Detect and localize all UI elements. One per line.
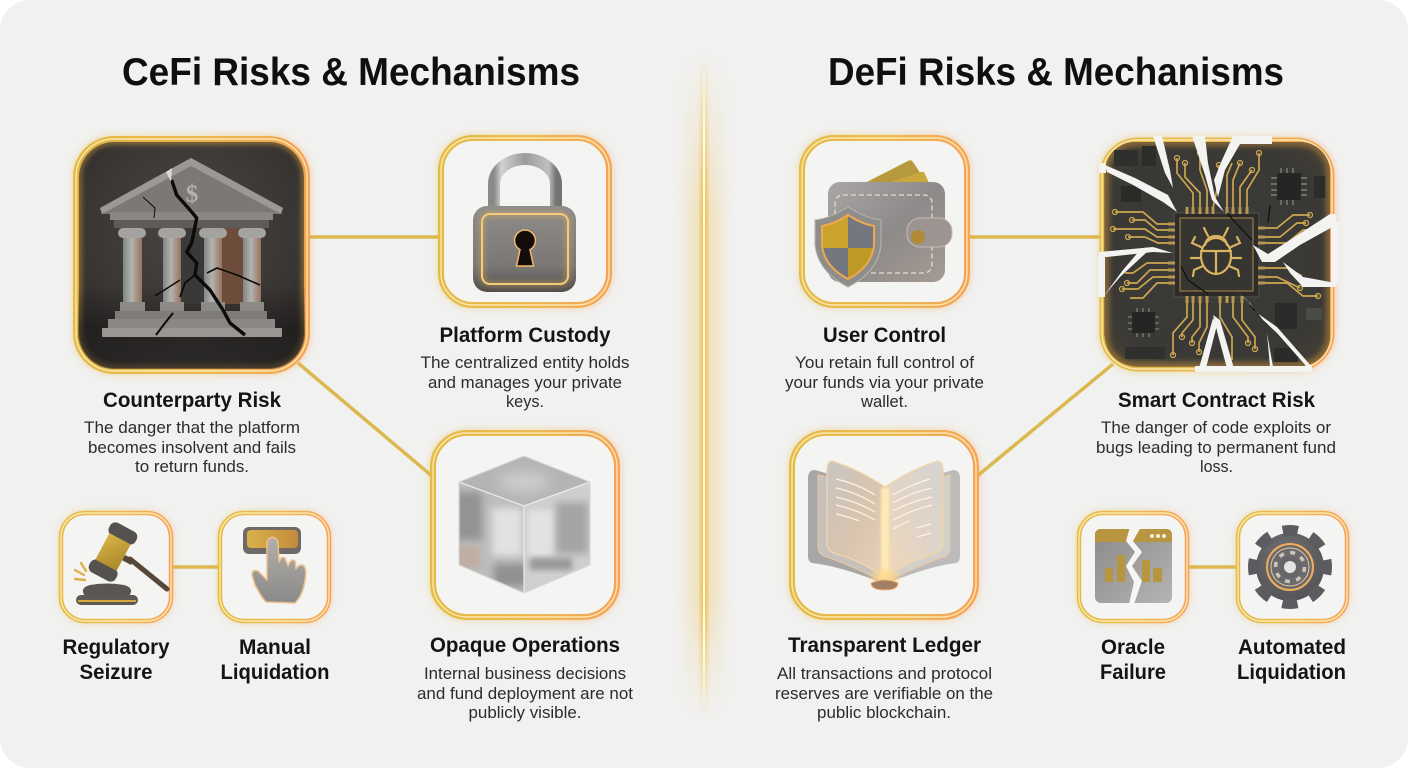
text: transparent ledger description: public blockchain. (817, 704, 951, 722)
label: manual liquidation (220, 635, 330, 684)
connectors: DeFi (966, 237, 1239, 567)
text: opaque operations description (417, 665, 633, 722)
thin dark cracks (1181, 205, 1270, 325)
text: opaque operations description: Internal business decisions (424, 665, 626, 683)
panel: user control (802, 138, 967, 305)
heading: transparent ledger: Transparent Ledger (788, 634, 981, 657)
text: opaque operations description: publicly visible. (468, 704, 582, 722)
text: smart contract risk description: loss. (1200, 458, 1233, 476)
icon: frosted cube (458, 456, 590, 594)
panel: manual liquidation (220, 513, 329, 621)
icon: gavel (75, 520, 167, 605)
circuit traces (1113, 153, 1318, 360)
text: platform custody description (420, 354, 630, 411)
label: regulatory seizure: Regulatory (62, 635, 170, 659)
panel: regulatory seizure (61, 513, 171, 621)
text: smart contract risk description: bugs leading to permanent fund (1096, 439, 1336, 457)
title: DeFi: DeFi Risks & Mechanisms (828, 51, 1284, 94)
text: opaque operations description: and fund deployment are not (417, 685, 633, 703)
text: counterparty risk description: becomes insolvent and fails (88, 439, 296, 457)
icon detail: cracks (143, 180, 260, 335)
text: user control description: wallet. (860, 393, 908, 411)
frame: broken gold border (1102, 140, 1332, 369)
small chips (1114, 146, 1325, 362)
title: CeFi: CeFi Risks & Mechanisms (122, 51, 580, 94)
connectors: CeFi (170, 237, 441, 567)
heading: platform custody: Platform Custody (440, 324, 611, 347)
panel: opaque operations (433, 433, 617, 617)
central processor (1168, 207, 1265, 303)
text: user control description: your funds via your private (785, 374, 984, 392)
text: smart contract risk description (1096, 419, 1336, 476)
icon: circuit board with bug (1098, 136, 1339, 372)
label: manual liquidation: Liquidation (220, 660, 330, 684)
label: oracle failure: Failure (1100, 660, 1166, 684)
bug glyph (1191, 228, 1241, 276)
text: transparent ledger description: All transactions and protocol (777, 665, 992, 683)
icon: glowing open book (808, 461, 960, 590)
panel: oracle failure (1079, 513, 1187, 621)
text: counterparty risk description: to return funds. (135, 458, 249, 476)
icon: wallet with shield (815, 160, 952, 287)
text: user control description: You retain full control of (795, 354, 974, 372)
icon: padlock (473, 159, 576, 292)
heading: user control: User Control (823, 324, 946, 347)
panel: smart contract risk (775, 136, 1347, 722)
heading: counterparty risk: Counterparty Risk (103, 389, 281, 412)
label: regulatory seizure (62, 635, 170, 684)
white fracture shards (1098, 136, 1339, 372)
panel: automated liquidation (1238, 513, 1347, 621)
icon detail: dollar sign: $ (186, 181, 198, 208)
label: manual liquidation: Manual (239, 635, 311, 659)
icon: hand pressing button (243, 527, 306, 603)
icon: gear (1254, 530, 1326, 604)
panel: platform custody (441, 138, 609, 305)
label: oracle failure (1100, 635, 1166, 684)
trace pads (1110, 150, 1320, 358)
text: transparent ledger description: reserves are verifiable on the (775, 685, 993, 703)
label: automated liquidation: Automated (1238, 635, 1346, 659)
label: automated liquidation (1237, 635, 1346, 684)
label: automated liquidation: Liquidation (1237, 660, 1346, 684)
text: transparent ledger description (775, 665, 993, 722)
heading: smart contract risk: Smart Contract Risk (1118, 389, 1315, 412)
icon: cracked bank (78, 141, 305, 370)
label: oracle failure: Oracle (1101, 635, 1165, 659)
text: user control description (785, 354, 984, 411)
icon: cracked oracle chart window (1095, 527, 1172, 604)
label: regulatory seizure: Seizure (80, 660, 153, 684)
text: platform custody description: The centralized entity holds (420, 354, 630, 372)
text: platform custody description: keys. (506, 393, 544, 411)
text: smart contract risk description: The danger of code exploits or (1101, 419, 1332, 437)
text: counterparty risk description (84, 419, 300, 476)
center divider (686, 55, 722, 715)
panel: transparent ledger (792, 433, 976, 617)
text: platform custody description: and manages your private (428, 374, 622, 392)
panel: counterparty risk (76, 139, 307, 371)
text: counterparty risk description: The danger that the platform (84, 419, 300, 437)
heading: opaque operations: Opaque Operations (430, 634, 620, 657)
